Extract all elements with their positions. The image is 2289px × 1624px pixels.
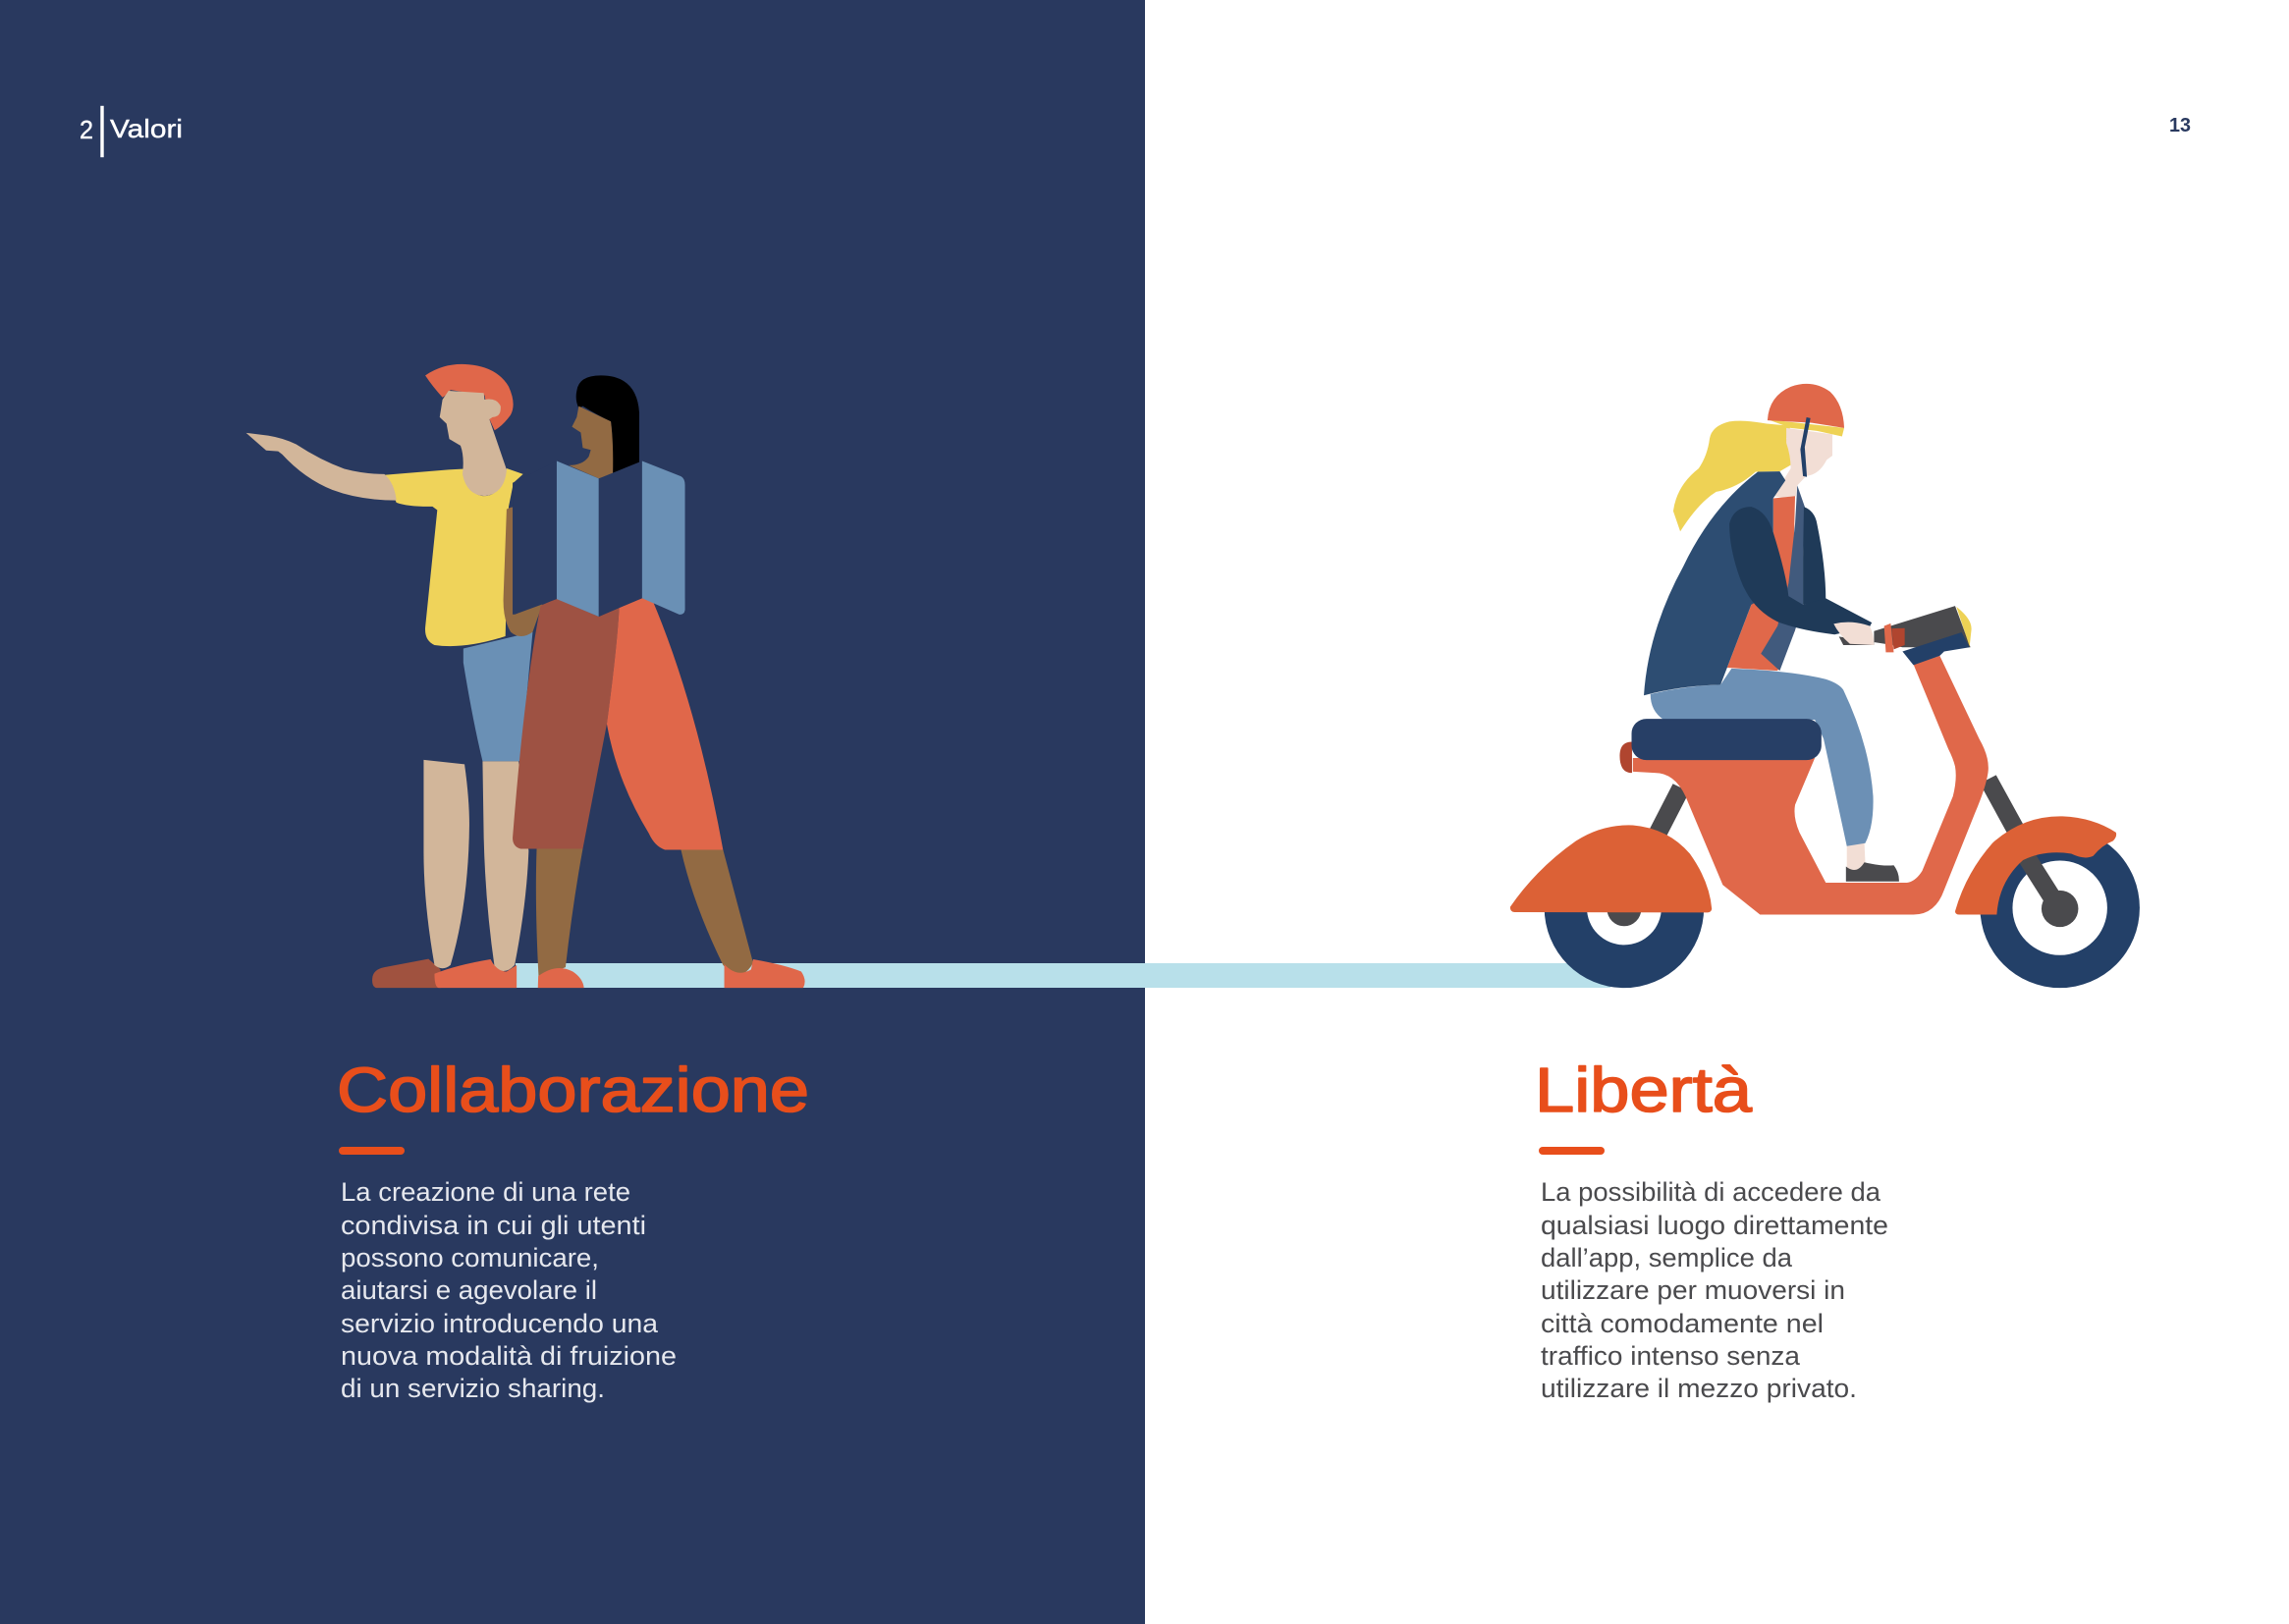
text block: Libertà: La possibilità di accedere da	[1541, 1177, 1881, 1207]
text block: Collaborazione: servizio introducendo una	[341, 1309, 659, 1338]
man	[246, 364, 532, 988]
woman	[504, 375, 805, 988]
rule under Libertà	[1539, 1147, 1605, 1155]
text block: Libertà: utilizzare per muoversi in	[1541, 1275, 1845, 1305]
text block: Libertà: utilizzare il mezzo privato.	[1541, 1374, 1857, 1403]
text block: Collaborazione	[341, 1177, 677, 1403]
text block: Libertà: città comodamente nel	[1541, 1309, 1824, 1338]
text block: Libertà	[1541, 1177, 1888, 1403]
text block: Collaborazione: La creazione di una rete	[341, 1177, 630, 1207]
heading: Collaborazione: Collaborazione	[337, 1055, 809, 1125]
text block: Collaborazione: possono comunicare,	[341, 1243, 599, 1272]
text block: Libertà: qualsiasi luogo direttamente	[1541, 1211, 1888, 1240]
folded map	[513, 460, 685, 617]
panel: navy left page	[0, 0, 1145, 1624]
ground bar	[516, 963, 1610, 988]
text block: Collaborazione: aiutarsi e agevolare il	[341, 1275, 597, 1305]
text block: Collaborazione: nuova modalità di fruizione	[341, 1341, 677, 1371]
text block: Libertà: traffico intenso senza	[1541, 1341, 1801, 1371]
illustration: woman on scooter	[1510, 384, 2140, 988]
section header: Valori	[110, 114, 183, 143]
text block: Libertà: dall’app, semplice da	[1541, 1243, 1793, 1272]
rider	[1644, 384, 1899, 882]
panel: white right page	[1145, 0, 2289, 1624]
scooter wheels	[1545, 780, 2140, 988]
handlebar and headlight	[1833, 606, 1972, 665]
section header: 2	[80, 115, 93, 144]
text block: Collaborazione: di un servizio sharing.	[341, 1374, 605, 1403]
page number: 13	[2169, 115, 2191, 136]
illustration: two people with a map	[246, 364, 805, 988]
scooter body	[1510, 656, 2116, 915]
section header	[80, 106, 183, 157]
scooter seat	[1632, 719, 1822, 760]
rule under Collaborazione	[339, 1147, 405, 1155]
heading: Libertà: Libertà	[1535, 1055, 1752, 1125]
text block: Collaborazione: condivisa in cui gli utenti	[341, 1211, 646, 1240]
